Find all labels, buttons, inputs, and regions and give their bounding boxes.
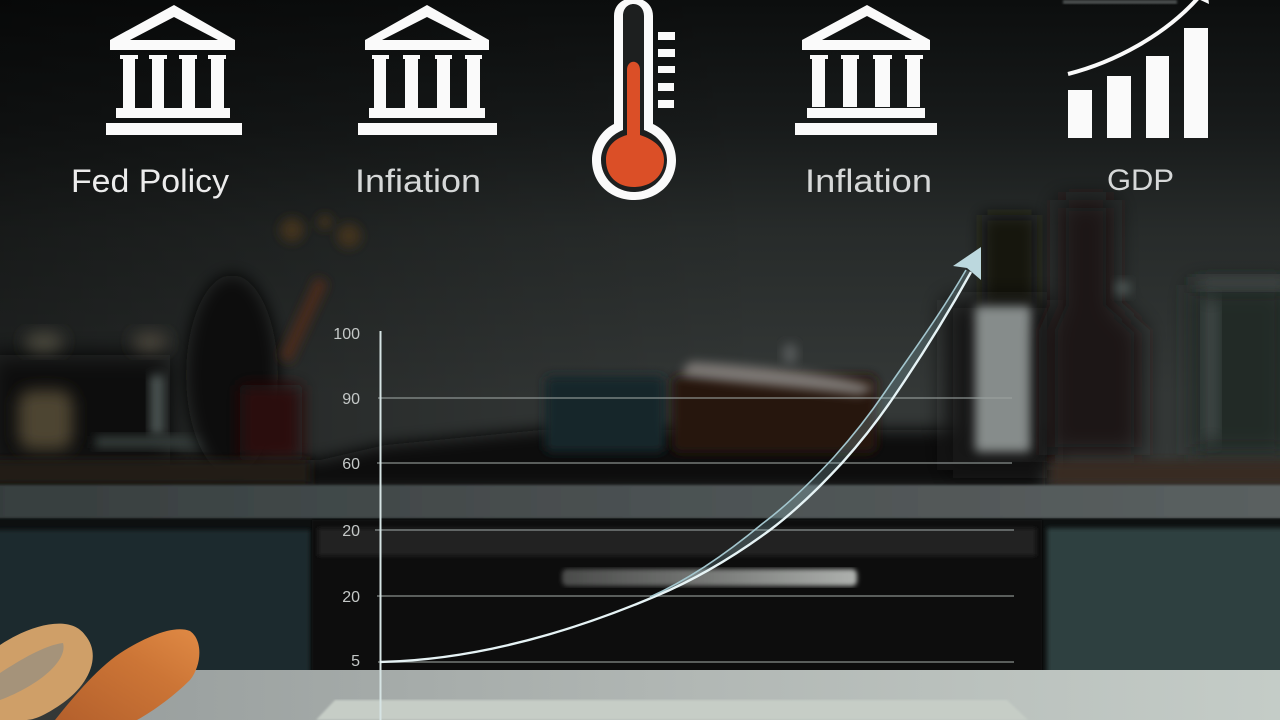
left jar — [18, 390, 73, 450]
icon: thermometer — [592, 0, 676, 200]
y axis labels: 60 — [342, 456, 360, 473]
bread crumb — [0, 643, 64, 700]
dried plant — [280, 215, 361, 360]
icon: bank, Fed Policy — [106, 5, 242, 135]
tick marks — [658, 32, 675, 108]
bread ring — [0, 624, 93, 720]
left canister — [150, 375, 164, 435]
y axis labels — [333, 326, 360, 670]
countertop band — [0, 485, 1280, 518]
dark surround of cylinder — [945, 300, 1055, 470]
red pot — [240, 385, 302, 460]
y axis labels: 20 — [342, 589, 360, 606]
arrow head — [953, 247, 981, 280]
table surface — [135, 670, 1280, 720]
mercury — [606, 62, 664, 187]
icon: GDP bars and arrow — [1063, 0, 1209, 138]
icon: bank, Inflation right — [795, 5, 937, 135]
white cylinder — [975, 306, 1031, 452]
grid lines — [375, 398, 1014, 662]
red cooking pot — [672, 375, 877, 453]
oven — [312, 520, 1042, 675]
brown bottle — [1047, 200, 1142, 455]
oven handle — [562, 569, 857, 586]
y axis labels: 90 — [342, 391, 360, 408]
label: Inflation: Inflation — [805, 163, 932, 199]
dark vase — [186, 275, 278, 475]
teal pot — [545, 376, 665, 452]
y axis labels: 5 — [351, 653, 360, 670]
left dark bottles — [0, 355, 170, 465]
label: Infiation: Infiation — [355, 163, 481, 199]
label: GDP: GDP — [1107, 164, 1174, 197]
carrot — [55, 629, 199, 720]
dark utensils — [982, 215, 1037, 315]
chart — [333, 247, 1014, 720]
right grey appliance — [1192, 285, 1280, 455]
shelf line — [0, 460, 310, 485]
lower cabinets — [0, 518, 1280, 675]
y axis labels: 20 — [342, 523, 360, 540]
y axis labels: 100 — [333, 326, 360, 343]
icon: bank, Inflation — [358, 5, 497, 135]
label: Fed Policy: Fed Policy — [71, 163, 229, 199]
paper sheet — [316, 700, 1028, 720]
bread roll and carrot — [0, 624, 199, 720]
rising curve with arrow — [380, 247, 981, 662]
backsplash shadow band — [0, 430, 1045, 490]
y axis — [380, 331, 382, 720]
right cabinet — [1047, 528, 1280, 678]
